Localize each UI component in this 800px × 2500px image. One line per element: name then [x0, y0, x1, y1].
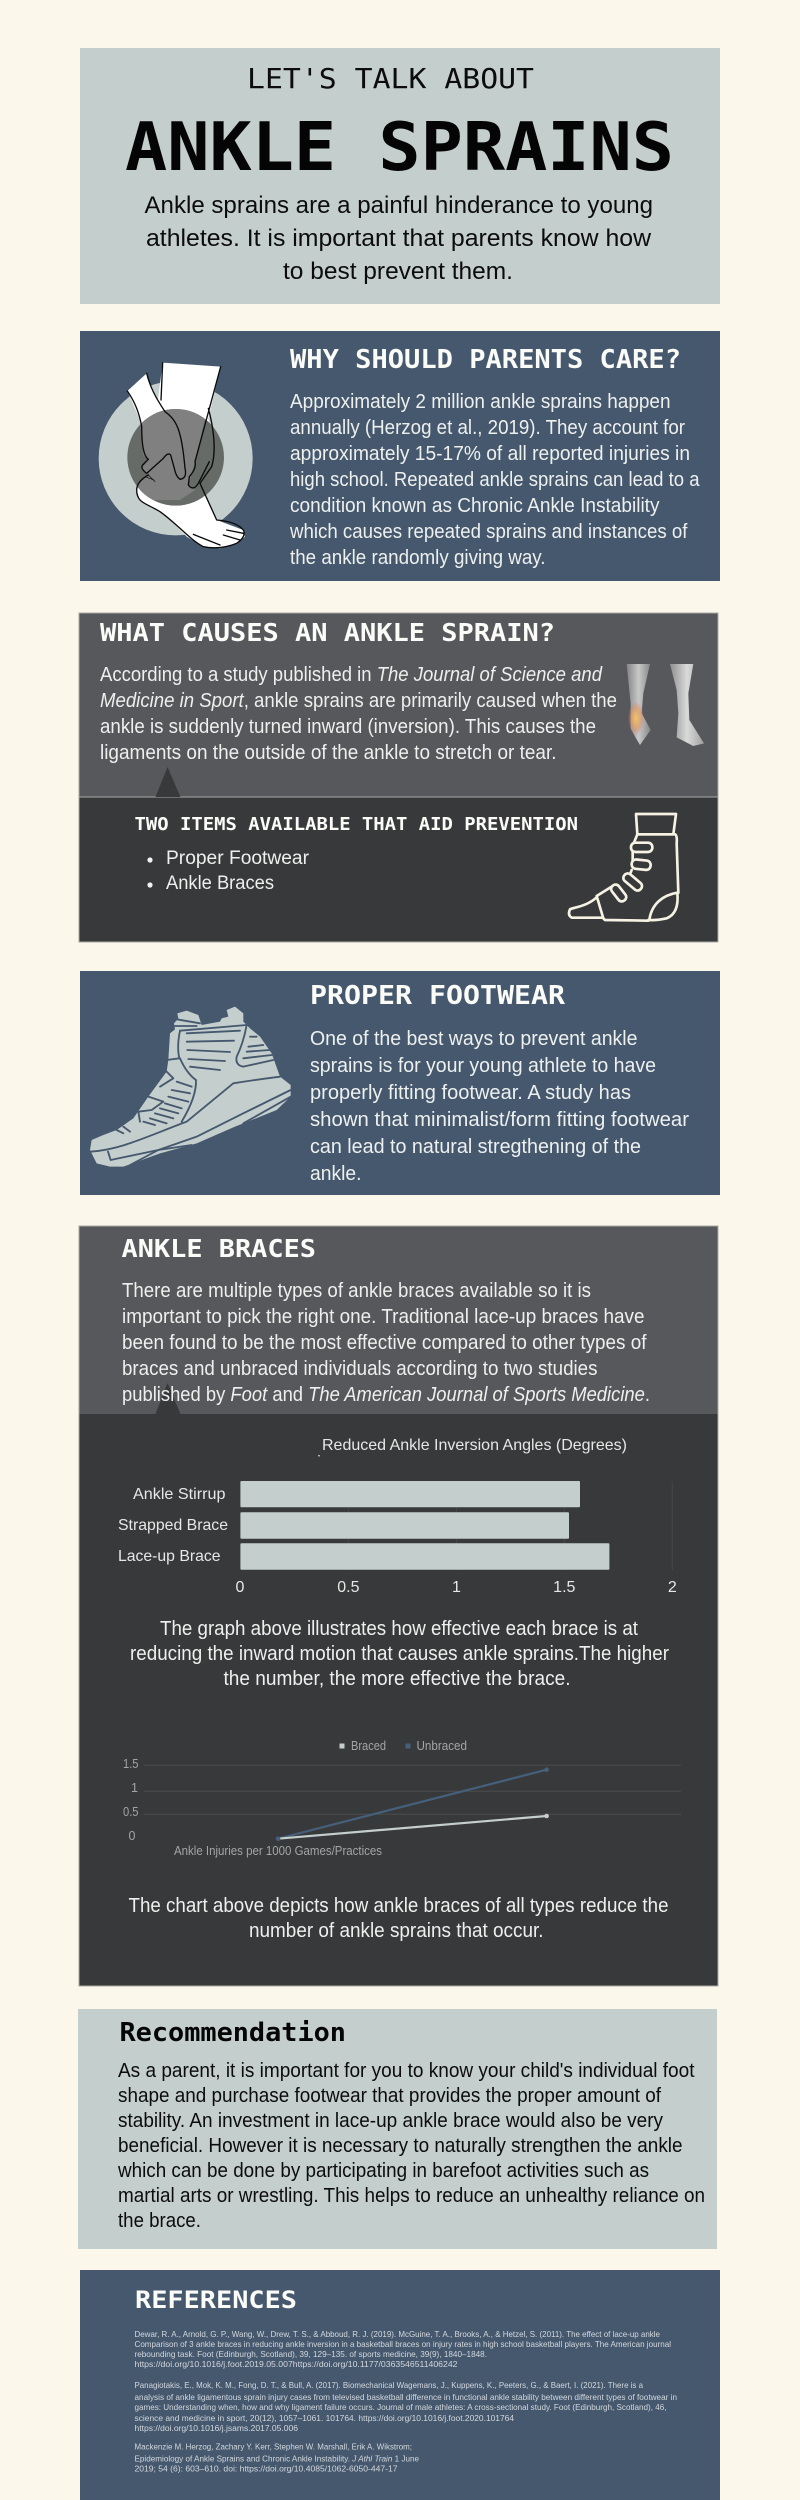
- body text: high school. Repeated ankle sprains can lead to a: [290, 469, 700, 491]
- bar chart: reduced ankle inversion angles: 1: [452, 1579, 461, 1596]
- line chart: injuries braced vs unbraced: 1: [131, 1781, 138, 1795]
- kicker: let's talk about: LET'S TALK ABOUT: [247, 62, 534, 95]
- subheading: two items: TWO ITEMS AVAILABLE THAT AID PREVENTION: [134, 814, 578, 835]
- reference list: Panagiotakis, E., Mok, K. M., Fong, D. T., & Bull, A. (2017). Biomechanical Wagemans, J., Kuppens, K., Peeters, G., & Baert, I. (2021). There is a: [134, 2380, 643, 2390]
- caption: bar chart: The graph above illustrates how effective each brace is at: [160, 1618, 638, 1640]
- caption: line chart: [128, 1895, 668, 1942]
- chart title: Reduced Ankle Inversion Angles (Degrees): [322, 1437, 627, 1454]
- icon: high-top sneaker: [90, 1007, 291, 1167]
- caption: bar chart: reducing the inward motion that causes ankle sprains.The higher: [130, 1643, 669, 1665]
- heading: references: REFERENCES: [135, 2286, 297, 2314]
- reference list: Dewar, R. A., Arnold, G. P., Wang, W., Drew, T. S., & Abboud, R. J. (2019). McGuine, T. A., Brooks, A., & Hetzel, S. (2011). The effect of lace-up ankle: [134, 2329, 660, 2339]
- bar chart: reduced ankle inversion angles: Ankle Stirrup: [133, 1486, 226, 1503]
- bar chart: reduced ankle inversion angles: 2: [668, 1579, 677, 1596]
- body text: stability. An investment in lace-up ankle brace would also be very: [118, 2110, 663, 2132]
- body text: [122, 1280, 650, 1406]
- reference list: https://doi.org/10.1016/j.foot.2019.05.007https://doi.org/10.1177/0363546511406242: [134, 2359, 458, 2369]
- reference list: https://doi.org/10.1016/j.jsams.2017.05.006: [134, 2423, 298, 2433]
- body text: There are multiple types of ankle braces available so it is: [122, 1280, 591, 1302]
- body text: martial arts or wrestling. This helps to reduce an unhealthy reliance on: [118, 2185, 705, 2207]
- image: sprained and healthy ankle: [627, 664, 704, 746]
- panel: what causes an ankle sprain: [79, 613, 718, 942]
- intro text: to best prevent them.: [283, 258, 513, 285]
- legend: Braced: [351, 1739, 386, 1753]
- body text: As a parent, it is important for you to know your child's individual foot: [118, 2060, 695, 2082]
- panel: ankle braces: [79, 1226, 718, 1986]
- pointer triangle: [156, 767, 180, 797]
- icon: hands holding injured foot: [99, 363, 253, 548]
- body text: shown that minimalist/form fitting footwear: [310, 1109, 689, 1131]
- reference list: [134, 2329, 677, 2474]
- bar chart: reduced ankle inversion angles: [118, 1437, 677, 1596]
- icon: ankle brace outline: [569, 814, 678, 921]
- body text: According to a study published in The Journal of Science and: [100, 664, 603, 686]
- body text: sprains is for your young athlete to have: [310, 1055, 656, 1077]
- body text: ligaments on the outside of the ankle to stretch or tear.: [100, 742, 556, 764]
- heading: proper footwear: PROPER FOOTWEAR: [310, 981, 565, 1011]
- heading: recommendation: Recommendation: [120, 2018, 346, 2048]
- reference list: 2019; 54 (6): 603–610. doi: https://doi.org/10.4085/1062-6050-447-17: [134, 2464, 398, 2474]
- heading: why should parents care: WHY SHOULD PARENTS CARE?: [290, 345, 681, 375]
- reference list: analysis of ankle ligamentous sprain injury cases from televised basketball difference in functional ankle stability between different types of footwear in: [134, 2392, 677, 2402]
- line chart: injuries braced vs unbraced: 1.5: [123, 1757, 139, 1771]
- bullet list: [147, 848, 310, 894]
- intro text: Ankle sprains are a painful hinderance to young: [144, 192, 653, 219]
- body text: published by Foot and The American Journal of Sports Medicine.: [122, 1384, 650, 1406]
- reference list: Mackenzie M. Herzog, Zachary Y. Kerr, Stephen W. Marshall, Erik A. Wikstrom;: [134, 2442, 412, 2452]
- reference list: rebounding task. Foot (Edinburgh, Scotland), 39, 129–135. of sports medicine, 39(9), 1840–1848.: [134, 2349, 487, 2359]
- body text: [117, 2060, 705, 2232]
- line chart: injuries braced vs unbraced: Ankle Injuries per 1000 Games/Practices: [174, 1843, 382, 1858]
- panel: why should parents care: [80, 331, 720, 581]
- caption: bar chart: the number, the more effective the brace.: [224, 1668, 570, 1690]
- body text: the ankle randomly giving way.: [290, 547, 546, 569]
- body text: which can be done by participating in barefoot activities such as: [117, 2160, 649, 2182]
- legend: [340, 1739, 467, 1753]
- body text: properly fitting footwear. A study has: [310, 1082, 631, 1104]
- bar chart: reduced ankle inversion angles: 0: [236, 1579, 245, 1596]
- body text: important to pick the right one. Traditional lace-up braces have: [122, 1306, 644, 1328]
- reference list: science and medicine in sport, 20(12), 1057–1061. 101764. https://doi.org/10.1016/j.foot.2020.101764: [134, 2413, 514, 2423]
- bar chart: reduced ankle inversion angles: 0.5: [337, 1579, 360, 1596]
- intro text: [144, 192, 653, 285]
- pointer triangle: [156, 1383, 180, 1414]
- body text: Approximately 2 million ankle sprains happen: [290, 391, 670, 413]
- intro text: athletes. It is important that parents know how: [146, 225, 652, 252]
- body text: been found to be the most effective compared to other types of: [122, 1332, 647, 1354]
- body text: Medicine in Sport, ankle sprains are primarily caused when the: [100, 690, 617, 712]
- bar chart: reduced ankle inversion angles: 1.5: [553, 1579, 576, 1596]
- reference list: games: Understanding when, how and why ligament failure occurs. Journal of male athletes: A cross-sectional study. Foot (Edinburgh, Scotland), 46,: [134, 2402, 666, 2412]
- title: ankle sprains: ANKLE SPRAINS: [125, 108, 674, 186]
- body text: the brace.: [118, 2210, 201, 2232]
- body text: condition known as Chronic Ankle Instability: [290, 495, 660, 517]
- reference list: Epidemiology of Ankle Sprains and Chronic Ankle Instability. J Athl Train 1 June: [134, 2454, 419, 2464]
- bar chart: reduced ankle inversion angles: Lace-up Brace: [118, 1548, 221, 1565]
- body text: shape and purchase footwear that provides the proper amount of: [118, 2085, 661, 2107]
- body text: beneficial. However it is necessary to naturally strengthen the ankle: [118, 2135, 682, 2157]
- line chart: injuries braced vs unbraced: [123, 1739, 681, 1858]
- body text: [289, 391, 700, 569]
- heading: what causes: WHAT CAUSES AN ANKLE SPRAIN?: [100, 618, 555, 647]
- panel: proper footwear: [80, 971, 720, 1195]
- body text: annually (Herzog et al., 2019). They account for: [290, 417, 685, 439]
- body text: [310, 1028, 689, 1185]
- body text: braces and unbraced individuals according to two studies: [122, 1358, 598, 1380]
- legend: Unbraced: [416, 1739, 467, 1753]
- reference list: Comparison of 3 ankle braces in reducing ankle inversion in a basketball braces on injury rates in high school basketball players. The American journal: [134, 2339, 671, 2349]
- bullet list: Proper Footwear: [166, 848, 310, 869]
- caption: line chart: number of ankle sprains that occur.: [249, 1920, 544, 1942]
- body text: ankle is suddenly turned inward (inversion). This causes the: [100, 716, 596, 738]
- line chart: injuries braced vs unbraced: 0.5: [123, 1805, 139, 1819]
- body text: [100, 664, 617, 764]
- body text: ankle.: [310, 1163, 362, 1185]
- bar chart: reduced ankle inversion angles: Strapped Brace: [118, 1517, 228, 1534]
- body text: which causes repeated sprains and instances of: [289, 521, 688, 543]
- caption: bar chart: [130, 1618, 669, 1690]
- panel: references: [80, 2270, 720, 2500]
- heading: ankle braces: ANKLE BRACES: [122, 1234, 316, 1263]
- line chart: injuries braced vs unbraced: 0: [128, 1829, 136, 1843]
- body text: approximately 15-17% of all reported injuries in: [290, 443, 690, 465]
- body text: One of the best ways to prevent ankle: [310, 1028, 638, 1050]
- bullet list: Ankle Braces: [166, 873, 274, 894]
- panel: recommendation: [78, 2009, 717, 2249]
- caption: line chart: The chart above depicts how ankle braces of all types reduce the: [128, 1895, 668, 1917]
- body text: can lead to natural stregthening of the: [310, 1136, 641, 1158]
- panel: title banner: [80, 48, 720, 304]
